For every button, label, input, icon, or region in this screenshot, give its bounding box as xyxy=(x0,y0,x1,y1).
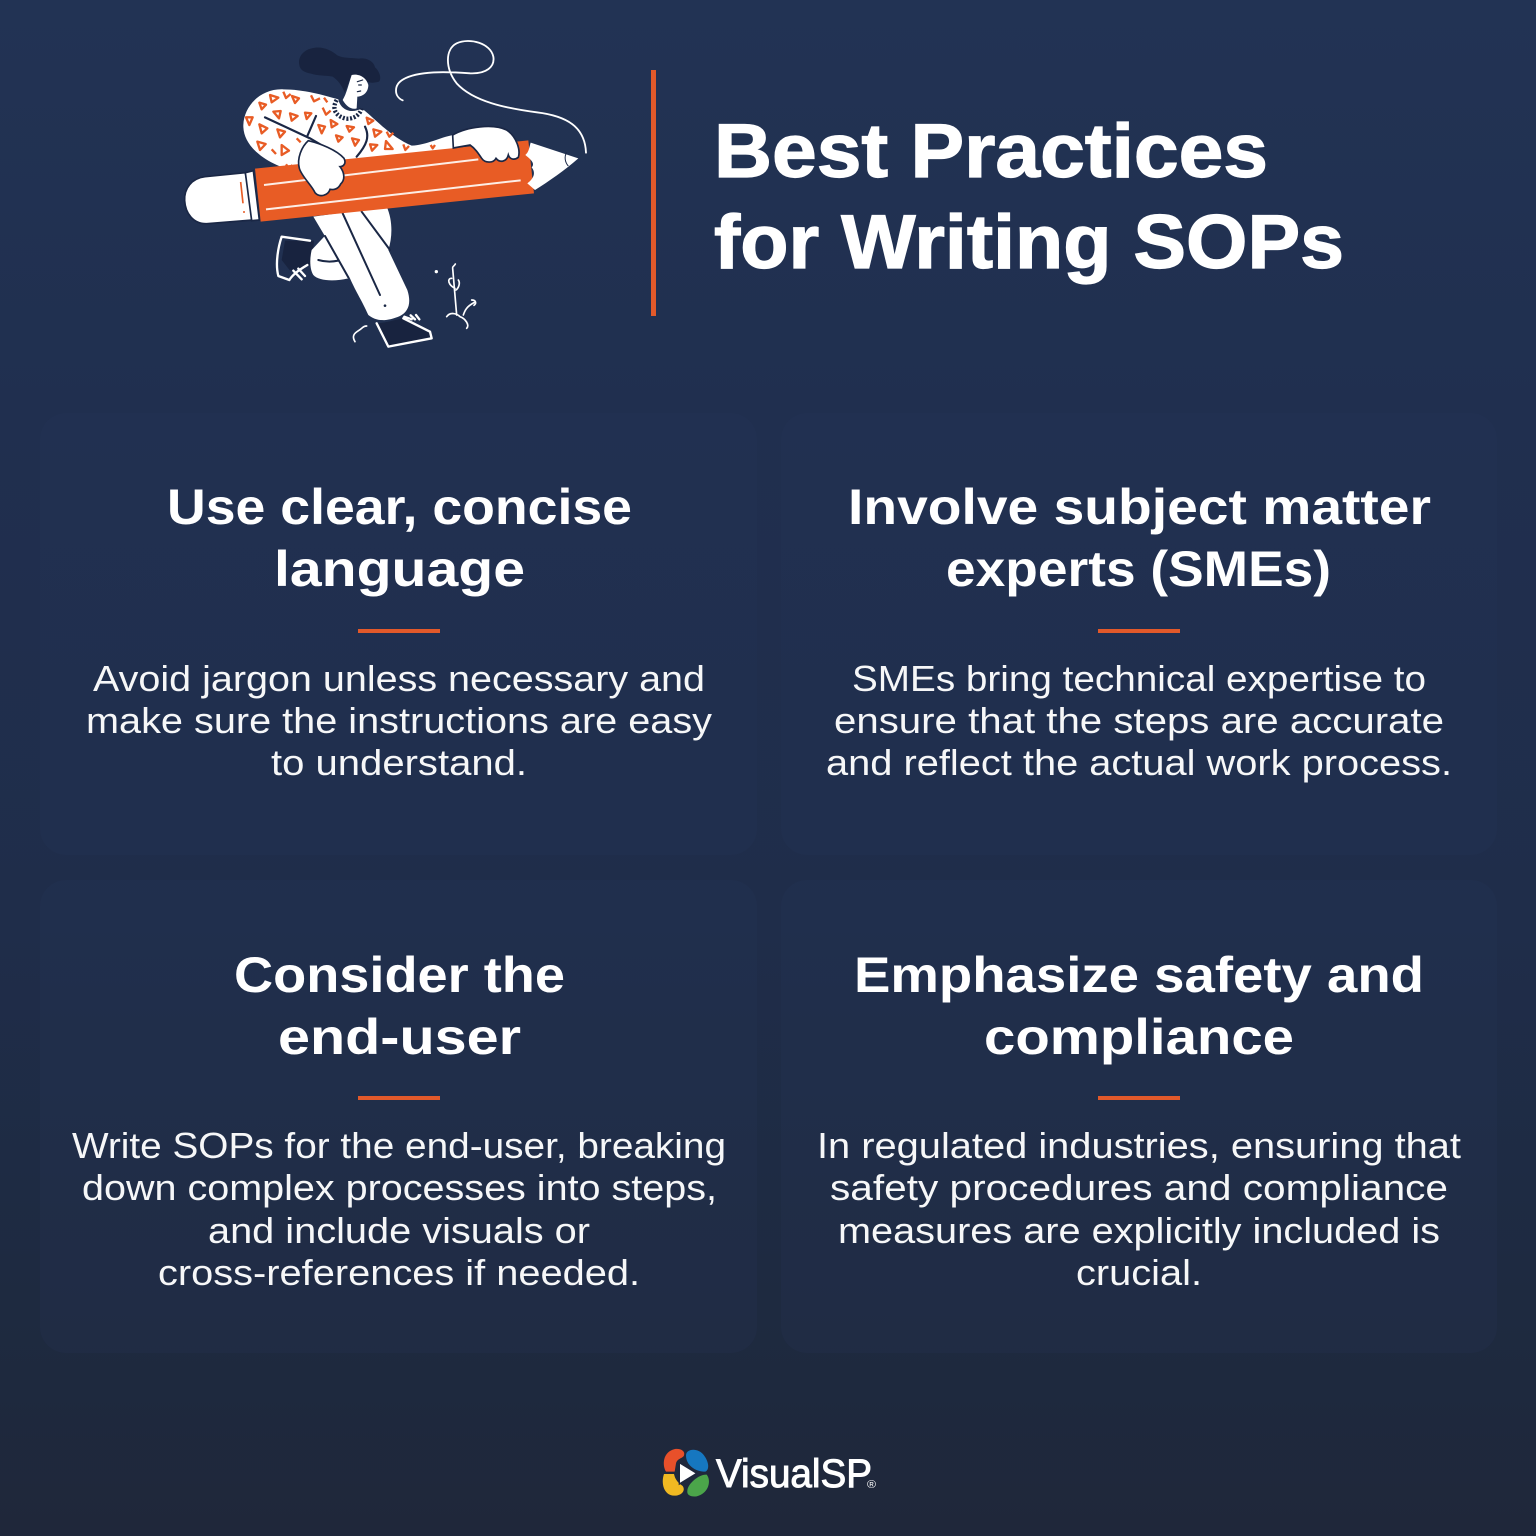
leg fold lines xyxy=(318,212,390,295)
heading: compliance xyxy=(984,1009,1294,1065)
face details xyxy=(357,80,363,92)
sprout plant xyxy=(447,264,476,328)
heading: Involve subject matter xyxy=(848,479,1431,535)
collar xyxy=(334,100,362,119)
panel: use clear, concise language xyxy=(40,413,757,855)
swirling pencil line xyxy=(396,41,586,153)
body text: cross-references if needed. xyxy=(158,1252,640,1293)
body text: and reflect the actual work process. xyxy=(826,742,1452,783)
back thigh xyxy=(310,234,357,280)
pencil eraser xyxy=(185,173,253,224)
back shoe xyxy=(277,237,314,280)
title: for Writing SOPs xyxy=(714,200,1344,285)
front leg xyxy=(313,207,409,320)
pencil tip xyxy=(525,143,578,190)
body text: to understand. xyxy=(271,742,527,783)
heading xyxy=(167,479,632,597)
body text xyxy=(72,1125,726,1293)
body text: ensure that the steps are accurate xyxy=(834,700,1444,741)
body text xyxy=(86,658,712,783)
right hand xyxy=(453,126,519,162)
body text: measures are explicitly included is xyxy=(838,1210,1440,1251)
heading xyxy=(234,947,565,1065)
body text: and include visuals or xyxy=(208,1210,590,1251)
heading: language xyxy=(274,541,525,597)
illustration: person carrying giant pencil xyxy=(185,41,586,347)
body text: Avoid jargon unless necessary and xyxy=(93,658,705,699)
body text: Write SOPs for the end-user, breaking xyxy=(72,1125,726,1166)
heading xyxy=(854,947,1424,1065)
heading: Consider the xyxy=(234,947,565,1003)
heading: Emphasize safety and xyxy=(854,947,1424,1003)
body text xyxy=(817,1125,1461,1293)
hair xyxy=(299,47,380,93)
sweater triangle pattern xyxy=(246,92,435,169)
heading xyxy=(848,479,1431,597)
heading: end-user xyxy=(278,1009,521,1065)
body text: crucial. xyxy=(1076,1252,1202,1293)
icon: logo mark xyxy=(663,1449,709,1496)
panel: consider the end-user xyxy=(40,880,757,1353)
head and neck xyxy=(343,75,368,109)
heading: experts (SMEs) xyxy=(946,541,1331,597)
sweater xyxy=(243,89,457,173)
logo: VisualSP: VisualSP xyxy=(716,1452,872,1496)
title: Best Practices xyxy=(714,109,1268,194)
body text: SMEs bring technical expertise to xyxy=(852,658,1426,699)
pencil band xyxy=(245,171,259,221)
pencil xyxy=(185,140,578,224)
panel: involve subject matter experts xyxy=(781,413,1497,855)
body text: down complex processes into steps, xyxy=(82,1167,717,1208)
body text: make sure the instructions are easy xyxy=(86,700,712,741)
pencil body xyxy=(255,140,534,222)
title divider xyxy=(651,70,656,316)
body text: safety procedures and compliance xyxy=(830,1167,1448,1208)
ground squiggle xyxy=(353,326,367,342)
heading: Use clear, concise xyxy=(167,479,632,535)
front shoe xyxy=(377,315,432,347)
left hand xyxy=(299,141,345,196)
sweater arm lines xyxy=(265,116,367,157)
panel: emphasize safety and compliance xyxy=(781,880,1497,1353)
body text xyxy=(826,658,1452,783)
logo: VisualSP: ® xyxy=(867,1479,876,1491)
body text: In regulated industries, ensuring that xyxy=(817,1125,1461,1166)
logo: VisualSP xyxy=(663,1449,876,1496)
pencil highlights xyxy=(264,159,521,209)
title xyxy=(714,109,1344,285)
